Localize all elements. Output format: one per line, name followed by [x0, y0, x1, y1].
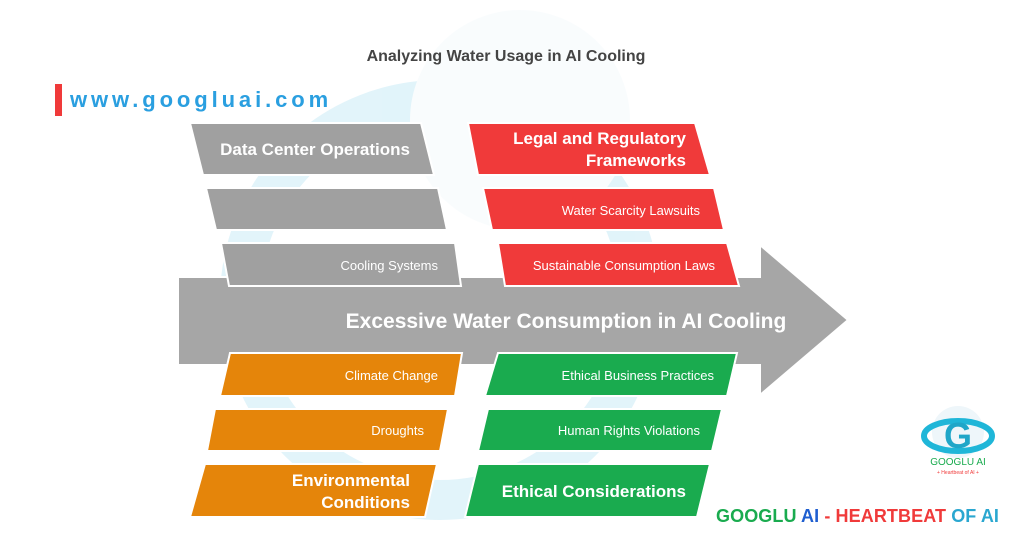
text: environmental: [292, 368, 438, 512]
main arrow: Excessive Water Consumption in AI Cooling: [346, 310, 786, 333]
text: ethical: Human Rights Violations: [558, 423, 700, 438]
text: legal: Frameworks: [586, 151, 686, 170]
text: data center: [220, 140, 438, 273]
panel: ethical: [465, 353, 737, 517]
panel: legal: [468, 123, 739, 286]
logo: GOOGLU AI: [930, 457, 986, 468]
text: environmental: Climate Change: [345, 368, 438, 383]
text: environmental: Droughts: [371, 423, 424, 438]
website url: www.googluai.com: [69, 87, 332, 112]
text: environmental: Conditions: [321, 493, 410, 512]
watermark background: [240, 10, 640, 500]
brand tagline: GOOGLU AI - HEARTBEAT OF AI: [716, 506, 999, 526]
text: data center: Cooling Systems: [340, 258, 438, 273]
title: Analyzing Water Usage in AI Cooling: [367, 48, 645, 65]
panel: data center operations: [190, 123, 461, 286]
logo: + Heartbeat of AI +: [937, 470, 979, 476]
text: legal: Water Scarcity Lawsuits: [562, 203, 700, 218]
text: data center: Data Center Operations: [220, 140, 410, 159]
text: ethical: Ethical Business Practices: [562, 368, 714, 383]
text: legal: Legal and Regulatory: [513, 129, 687, 148]
text: legal: [513, 129, 715, 273]
text: ethical: Ethical Considerations: [502, 482, 686, 501]
logo: G: [944, 415, 972, 456]
text: ethical: [502, 368, 714, 501]
logo: [924, 406, 992, 476]
text: legal: Sustainable Consumption Laws: [533, 258, 715, 273]
text: environmental: Environmental: [292, 471, 410, 490]
panel: environmental: [190, 353, 462, 517]
main arrow: [178, 245, 848, 395]
